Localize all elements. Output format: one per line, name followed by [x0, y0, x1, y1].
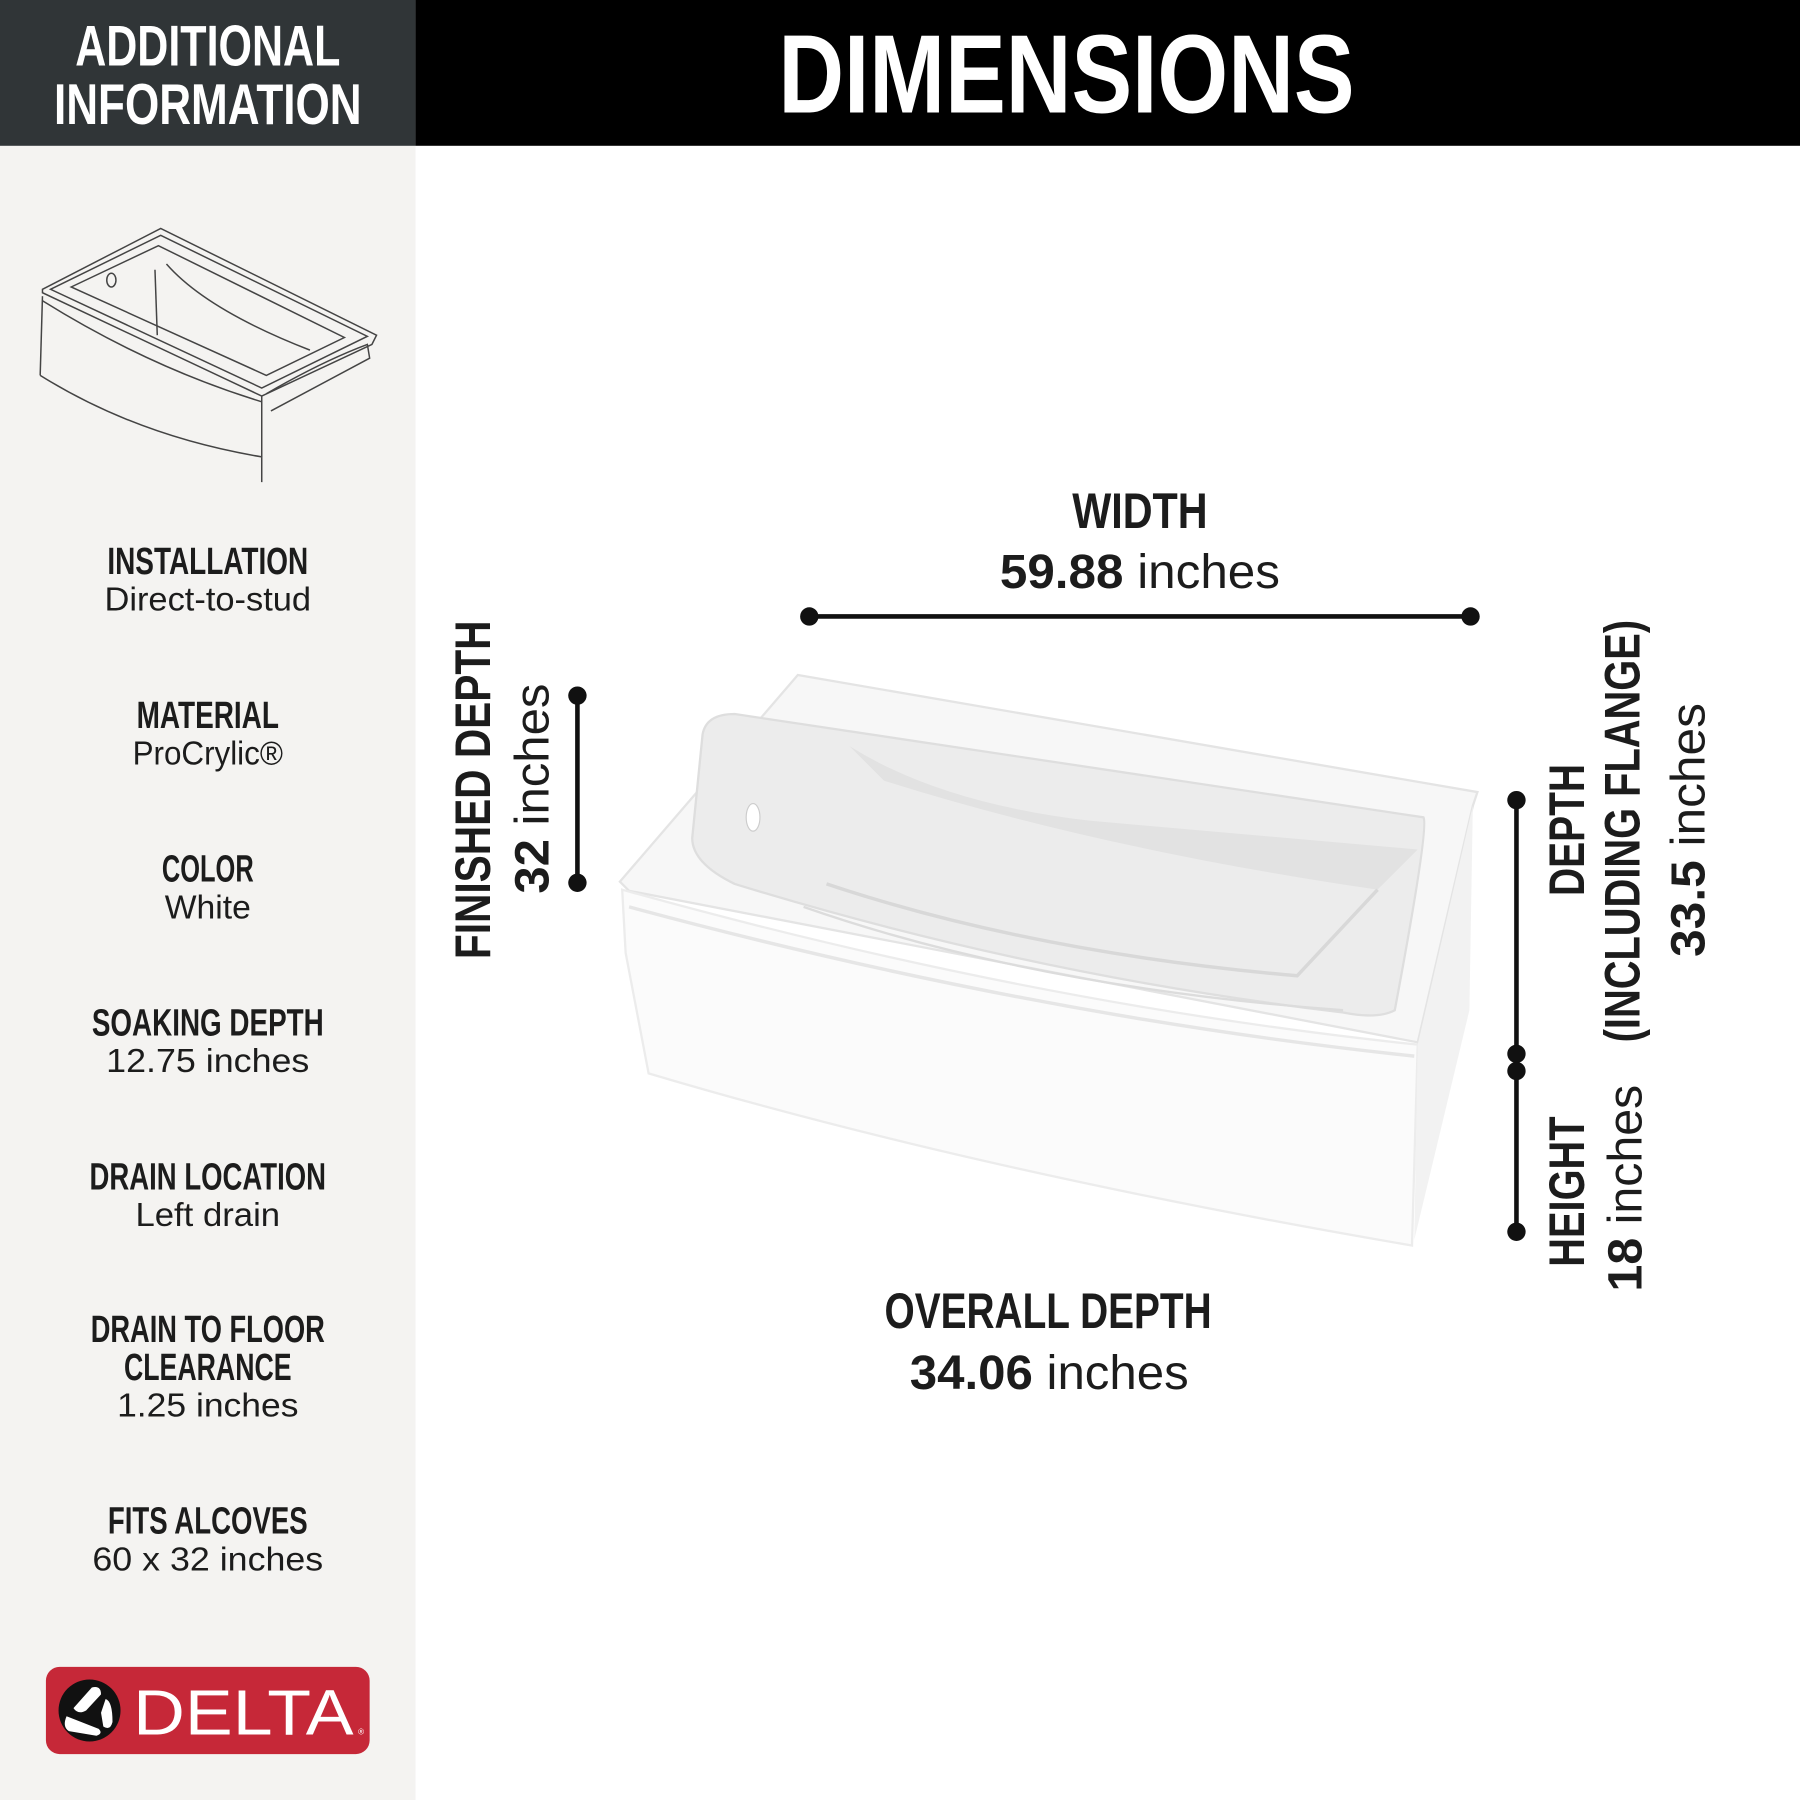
text block: installation	[104, 541, 311, 619]
text block: fits alcoves	[92, 1501, 323, 1578]
text block: fits alcoves: 60 x 32 inches	[92, 1541, 323, 1578]
text block: drain location	[90, 1156, 326, 1234]
text block: color: White	[165, 889, 251, 926]
dimension: depth including flange: (INCLUDING FLANGE)	[1593, 620, 1650, 1042]
panel: left header	[0, 0, 416, 146]
text block: installation: INSTALLATION	[107, 541, 308, 583]
text block: soaking depth: SOAKING DEPTH	[92, 1002, 324, 1044]
text block: drain to floor clearance: 1.25 inches	[117, 1388, 298, 1425]
dimension: depth including flange	[1507, 620, 1716, 1063]
text block: color	[162, 849, 254, 926]
title: dimensions header	[416, 0, 1800, 146]
logo: delta: ®	[358, 1728, 364, 1737]
panel: left sidebar background	[0, 0, 416, 1800]
text block: fits alcoves: FITS ALCOVES	[108, 1501, 308, 1543]
logo: delta: DELTA	[133, 1677, 354, 1749]
icon: small tub line drawing	[40, 228, 377, 482]
dimension: finished depth	[444, 620, 587, 959]
text block: drain to floor clearance	[91, 1309, 325, 1425]
text block: material: MATERIAL	[137, 695, 279, 737]
text block: drain location: Left drain	[135, 1197, 280, 1234]
dimension: overall depth	[885, 1282, 1212, 1400]
dimension: finished depth: FINISHED DEPTH	[444, 620, 501, 959]
dimension: finished depth: 32 inches	[506, 684, 560, 894]
text block: color: COLOR	[162, 849, 254, 891]
dimension: width: 59.88 inches	[1000, 545, 1280, 599]
dimension: height: 18 inches	[1599, 1085, 1653, 1291]
text block: drain to floor clearance: DRAIN TO FLOOR	[91, 1309, 325, 1351]
logo: delta	[46, 1667, 370, 1754]
text block: installation: Direct-to-stud	[104, 582, 311, 619]
dimension: height: HEIGHT	[1538, 1116, 1595, 1267]
dimension: width	[800, 482, 1480, 626]
text block: soaking depth	[92, 1002, 324, 1080]
text block: material	[133, 695, 283, 773]
title: dimensions header: DIMENSIONS	[778, 12, 1355, 136]
illustration: bathtub	[620, 675, 1477, 1246]
dimension: overall depth: 34.06 inches	[910, 1346, 1189, 1400]
text block: drain location: DRAIN LOCATION	[90, 1156, 326, 1198]
text block: drain to floor clearance: CLEARANCE	[124, 1347, 292, 1389]
dimension: height	[1507, 1062, 1653, 1291]
dimension: overall depth: OVERALL DEPTH	[885, 1282, 1212, 1339]
panel: left header: ADDITIONAL	[75, 14, 340, 78]
panel: left header: INFORMATION	[54, 73, 362, 137]
dimension: depth including flange: DEPTH	[1538, 764, 1595, 896]
text block: material: ProCrylic®	[133, 736, 283, 773]
dimension: depth including flange: 33.5 inches	[1662, 703, 1716, 957]
dimension: width: WIDTH	[1072, 482, 1208, 539]
text block: soaking depth: 12.75 inches	[106, 1043, 309, 1080]
